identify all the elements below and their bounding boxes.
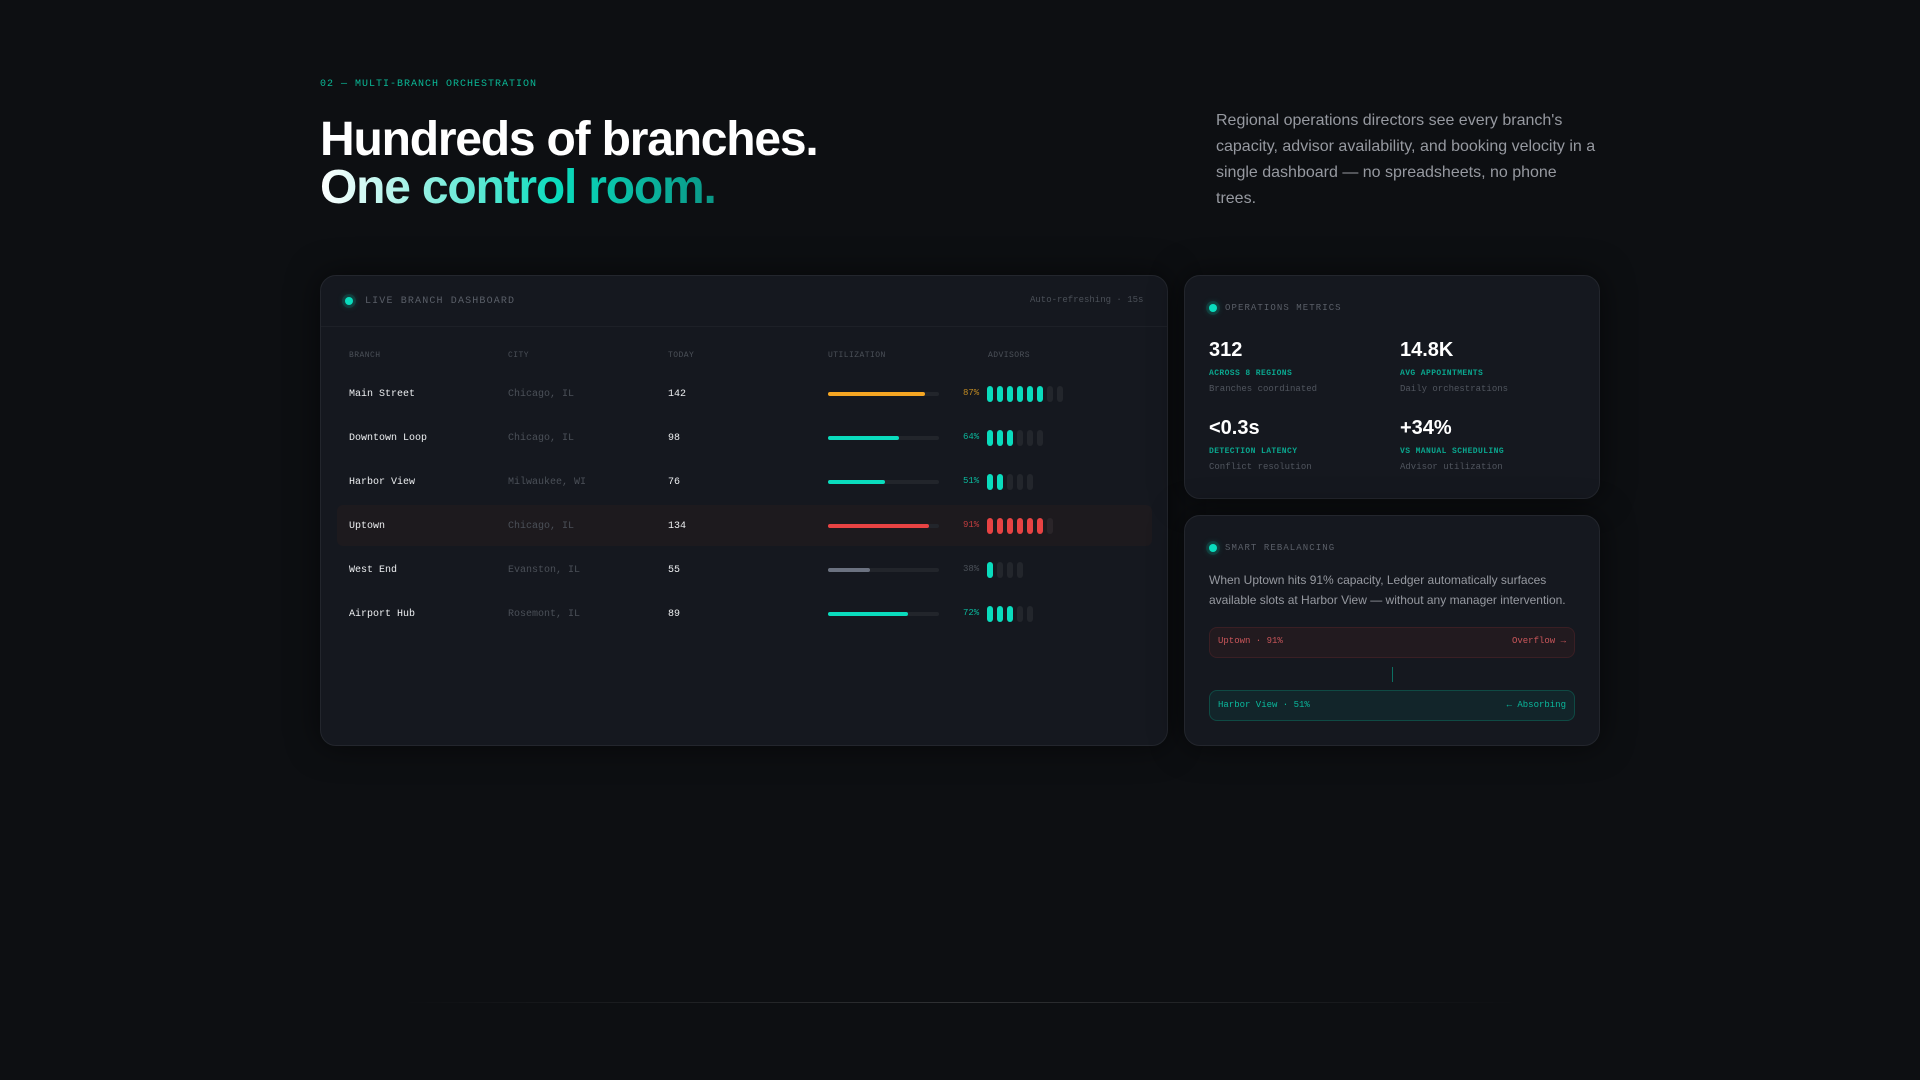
eyebrow: 02 — MULTI-BRANCH ORCHESTRATION [320,79,537,90]
column heading: utilization: UTILIZATION [828,351,886,360]
title: Hundreds of branches. [320,113,818,166]
metric: latency: DETECTION LATENCY [1209,447,1297,456]
overflow box: Uptown: Overflow → [1512,636,1566,646]
row: West End: 55 [668,565,680,576]
dashboard heading: LIVE BRANCH DASHBOARD [365,296,515,307]
row: Main Street: Chicago, IL [508,389,574,400]
header divider [321,326,1167,327]
status dot [1209,544,1217,552]
metrics heading: OPERATIONS METRICS [1225,303,1342,313]
metric: appointments: 14.8K [1400,339,1453,361]
metric: appointments: Daily orchestrations [1400,384,1508,394]
metric: appointments: AVG APPOINTMENTS [1400,369,1483,378]
row: Uptown (highlighted): Chicago, IL [508,521,574,532]
row: Main Street [349,386,1063,402]
intro paragraph [1216,112,1596,207]
absorbing box: Harbor View [1209,690,1575,721]
rebalancing description: When Uptown hits 91% capacity, Ledger automatically surfaces [1209,573,1546,587]
metric: latency: <0.3s [1209,417,1260,439]
panel: live branch dashboard [320,275,1168,746]
row: West End [349,562,1023,578]
metric: branches: 312 [1209,339,1242,361]
column heading: branch: BRANCH [349,351,381,360]
metric: appointments [1400,339,1508,394]
row: Downtown Loop: 64% [963,432,979,442]
row: Airport Hub: 89 [668,609,680,620]
row: Downtown Loop: 98 [668,433,680,444]
rebalancing description: available slots at Harbor View — without any manager intervention. [1209,593,1566,607]
rebalancing heading: SMART REBALANCING [1225,543,1335,553]
row: Downtown Loop [349,430,1043,446]
row: Harbor View [349,474,1033,490]
metric: utilization: +34% [1400,417,1452,439]
connector line [1392,667,1393,682]
row: West End: 38% [963,564,979,574]
title [320,113,818,214]
overflow box: Uptown [1209,627,1575,658]
refresh status: Auto-refreshing · 15s [1030,295,1143,305]
row: Airport Hub [349,606,1033,622]
row: Airport Hub: 72% [963,608,979,618]
metric: utilization: Advisor utilization [1400,462,1503,472]
row: Airport Hub: Rosemont, IL [508,609,580,620]
intro paragraph: trees. [1216,190,1256,207]
footer rule [400,1002,1520,1003]
row: Uptown (highlighted): Uptown [349,521,385,532]
metric: branches: ACROSS 8 REGIONS [1209,369,1292,378]
row: Uptown (highlighted) [349,518,1053,534]
row: Harbor View: 76 [668,477,680,488]
absorbing box: Harbor View: ← Absorbing [1507,700,1566,710]
intro paragraph: Regional operations directors see every branch's [1216,112,1562,129]
panel: smart rebalancing [1184,515,1600,746]
intro paragraph: capacity, advisor availability, and booking velocity in a [1216,138,1595,155]
row: West End: Evanston, IL [508,565,580,576]
row: Airport Hub: Airport Hub [349,609,415,620]
status dot [345,297,353,305]
row: Main Street: 142 [668,389,686,400]
metric: branches [1209,339,1317,394]
column heading: city: CITY [508,351,529,360]
column heading: advisors: ADVISORS [988,351,1030,360]
row: Downtown Loop: Chicago, IL [508,433,574,444]
metric: latency: Conflict resolution [1209,462,1312,472]
intro paragraph: single dashboard — no spreadsheets, no phone [1216,164,1557,181]
panel: operations metrics [1184,275,1600,499]
metric: latency [1209,417,1312,472]
row: Downtown Loop: Downtown Loop [349,433,427,444]
metric: utilization [1400,417,1504,472]
highlight band [337,505,1152,546]
row: Harbor View: Harbor View [349,477,415,488]
overflow box: Uptown: Uptown · 91% [1218,636,1283,646]
column heading: today: TODAY [668,351,694,360]
row: Uptown (highlighted): 134 [668,521,686,532]
row: Main Street: Main Street [349,389,415,400]
metric: utilization: VS MANUAL SCHEDULING [1400,447,1504,456]
status dot [1209,304,1217,312]
metric: branches: Branches coordinated [1209,384,1317,394]
row: Harbor View: Milwaukee, WI [508,477,586,488]
row: West End: West End [349,565,397,576]
row: Main Street: 87% [963,388,979,398]
title: One control room. [320,161,716,214]
absorbing box: Harbor View: Harbor View · 51% [1218,700,1310,710]
rebalancing description [1209,573,1566,607]
row: Harbor View: 51% [963,476,979,486]
row: Uptown (highlighted): 91% [963,520,979,530]
